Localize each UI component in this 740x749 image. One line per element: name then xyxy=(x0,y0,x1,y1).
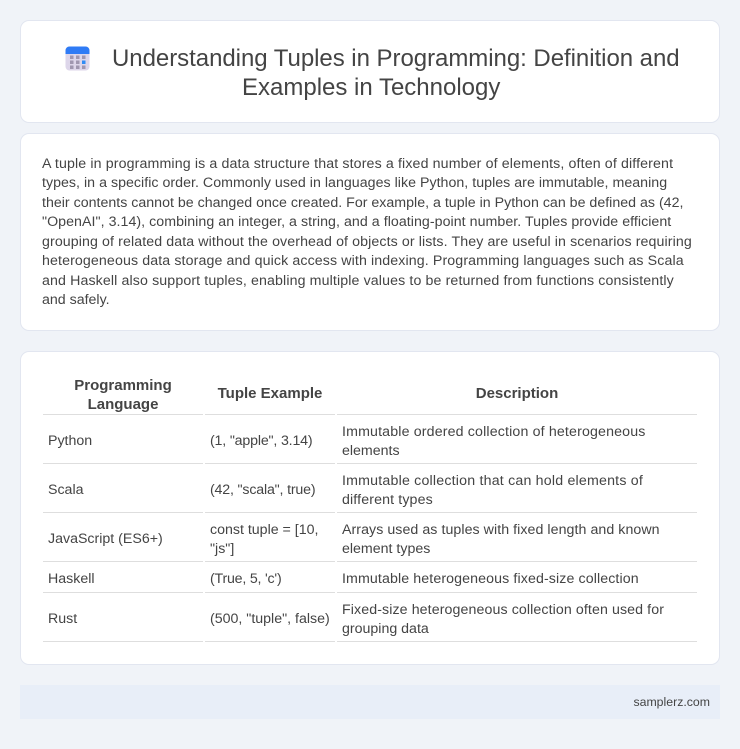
intro paragraph: and safely. xyxy=(42,292,110,308)
row: JavaScript: const tuple = [10, xyxy=(210,522,318,538)
row: Scala: (42, "scala", true) xyxy=(210,482,315,498)
intro paragraph: their contents cannot be changed once created. For example, a tuple in Python can be defined as (42, xyxy=(42,195,683,211)
footer text: samplerz.com xyxy=(633,695,710,709)
row: Scala: different types xyxy=(342,492,433,508)
row: JavaScript: JavaScript (ES6+) xyxy=(48,531,163,547)
intro paragraph: A tuple in programming is a data structure that stores a fixed number of elements, often of different xyxy=(42,156,673,172)
table header: Description xyxy=(476,385,558,402)
table header: Programming xyxy=(74,377,172,394)
intro paragraph: "OpenAI", 3.14), combining an integer, a string, and a floating-point number. Tuples provide efficient xyxy=(42,214,671,230)
row: Haskell: Immutable heterogeneous fixed-size collection xyxy=(342,571,639,587)
title: Examples in Technology xyxy=(242,74,500,101)
row: Python xyxy=(48,424,646,459)
intro paragraph: types, in a specific order. Commonly used in languages like Python, tuples are immutable, meaning xyxy=(42,175,667,191)
row: Rust xyxy=(48,602,664,637)
row: Rust: Rust xyxy=(48,611,77,627)
table header xyxy=(74,377,558,413)
row: Haskell xyxy=(48,571,639,587)
row: Python: Python xyxy=(48,433,92,449)
row: Haskell: Haskell xyxy=(48,571,95,587)
title: Understanding Tuples in Programming: Definition and xyxy=(112,45,680,72)
panel: table xyxy=(20,351,720,665)
icon: calendar xyxy=(66,46,90,70)
table header: Language xyxy=(88,396,158,413)
row: Rust: (500, "tuple", false) xyxy=(210,611,330,627)
row: Scala: Scala xyxy=(48,482,84,498)
row: Python: Immutable ordered collection of heterogeneous xyxy=(342,424,646,440)
intro paragraph: heterogeneous data storage and quick access with indexing. Programming languages such as Scala xyxy=(42,253,684,269)
row: JavaScript xyxy=(48,522,660,557)
row: Rust: grouping data xyxy=(342,621,429,637)
intro paragraph xyxy=(42,156,692,308)
row: Scala: Immutable collection that can hold elements of xyxy=(342,473,643,489)
row: Python: elements xyxy=(342,443,400,459)
row: Scala xyxy=(48,473,643,508)
table header: Tuple Example xyxy=(218,385,322,402)
row: JavaScript: "js"] xyxy=(210,541,234,557)
row: Python: (1, "apple", 3.14) xyxy=(210,433,312,449)
footer bar xyxy=(20,685,720,719)
intro paragraph: and Haskell also support tuples, enabling multiple values to be returned from functions consistently xyxy=(42,273,674,289)
row: Rust: Fixed-size heterogeneous collection often used for xyxy=(342,602,664,618)
row: JavaScript: Arrays used as tuples with fixed length and known xyxy=(342,522,660,538)
panel: intro text xyxy=(20,133,720,331)
title xyxy=(112,45,680,101)
row: Haskell: (True, 5, 'c') xyxy=(210,571,281,587)
intro paragraph: grouping of related data without the overhead of objects or lists. They are useful in scenarios requiring xyxy=(42,234,692,250)
header card xyxy=(20,20,720,123)
row: JavaScript: element types xyxy=(342,541,430,557)
